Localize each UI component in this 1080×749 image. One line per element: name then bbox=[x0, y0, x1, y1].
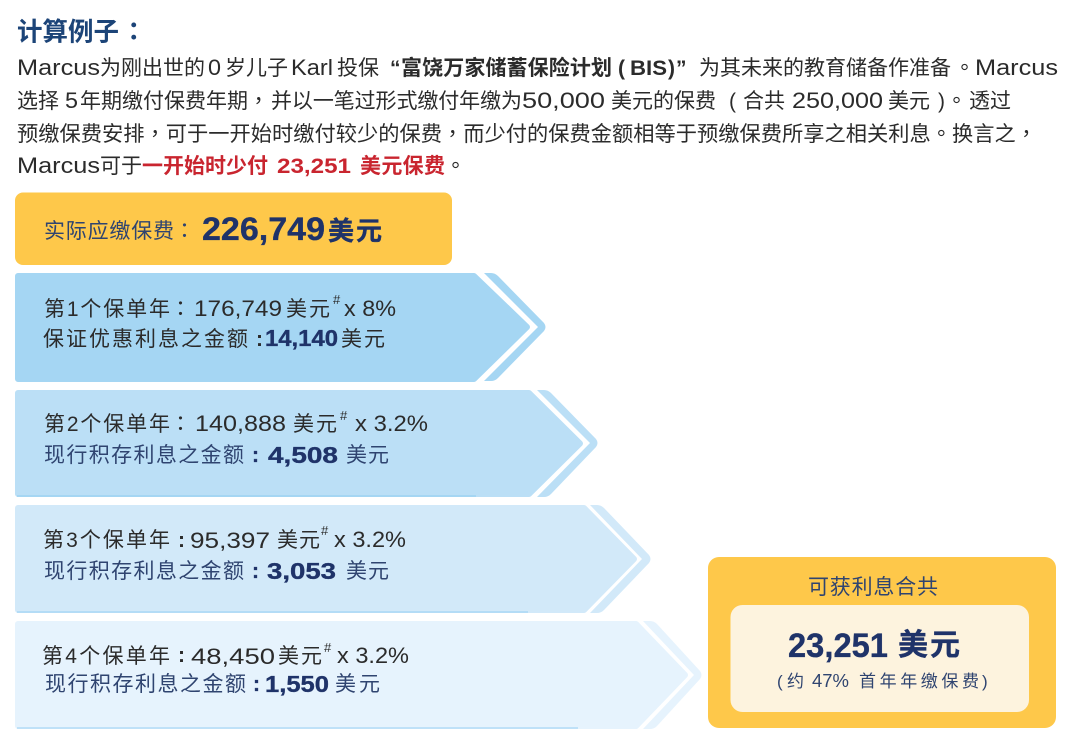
title: 计算例子 bbox=[17, 18, 119, 46]
intro paragraph: 而少付的保费金额相等于预缴保费所享之相关利息 bbox=[463, 122, 931, 146]
intro paragraph: 可于一开始时缴付较少的保费 bbox=[166, 122, 442, 146]
panel: policy year 3 arrow: 美元 bbox=[346, 560, 389, 583]
intro paragraph: 。 bbox=[946, 85, 967, 115]
intro paragraph: ， bbox=[248, 85, 269, 115]
intro paragraph: 23,251 bbox=[277, 155, 351, 178]
intro paragraph: ” bbox=[676, 57, 686, 80]
panel: policy year 2 arrow: 140,888 bbox=[195, 411, 286, 436]
panel: actual premium: 美元 bbox=[328, 216, 382, 246]
inner card: total amount bbox=[730, 605, 1029, 712]
panel: policy year 3 arrow: : bbox=[178, 529, 185, 552]
intro paragraph: 。 bbox=[445, 150, 466, 180]
panel: policy year 3 arrow: x 3.2% bbox=[334, 527, 406, 552]
panel: policy year 4 arrow: 美元 bbox=[335, 673, 380, 696]
intro paragraph: 为其未来的教育储备作准备 bbox=[699, 57, 951, 80]
panel: actual premium: ： bbox=[174, 215, 195, 245]
intro paragraph: 5 bbox=[65, 88, 78, 113]
panel: policy year 2 arrow: : bbox=[252, 444, 259, 467]
panel: actual premium: 实际应缴保费 bbox=[44, 220, 174, 243]
panel: policy year 4 arrow: 1,550 bbox=[265, 671, 329, 697]
panel: policy year 1 arrow: 美元 bbox=[341, 328, 385, 351]
panel: policy year 2 arrow: x 3.2% bbox=[355, 411, 428, 436]
intro paragraph: 美元 bbox=[888, 90, 930, 113]
intro paragraph: 50,000 bbox=[522, 88, 605, 113]
panel: policy year 1 arrow: # bbox=[333, 292, 341, 307]
intro paragraph: 。 bbox=[954, 52, 975, 82]
panel: total interest bbox=[708, 557, 1056, 728]
panel: actual premium bbox=[15, 192, 452, 265]
intro paragraph: Marcus bbox=[975, 55, 1058, 80]
panel: policy year 4 arrow: : bbox=[253, 673, 260, 696]
inner card: total amount: ( bbox=[777, 672, 783, 691]
panel: policy year 3 arrow: 95,397 bbox=[190, 528, 270, 553]
inner card: total amount: 首年年缴保费 bbox=[859, 672, 979, 691]
panel: policy year 4 arrow: 48,450 bbox=[191, 644, 275, 669]
panel: policy year 4 arrow: 美元 bbox=[278, 645, 322, 668]
intro paragraph bbox=[17, 52, 1058, 180]
intro paragraph: 一开始时少付 bbox=[142, 155, 268, 178]
panel: policy year 3 arrow: 3,053 bbox=[267, 558, 336, 584]
panel: policy year 1 arrow: 第1个保单年 bbox=[44, 298, 170, 321]
panel: policy year 4 arrow bbox=[17, 621, 702, 729]
intro paragraph: ， bbox=[144, 118, 166, 148]
intro paragraph: 。 bbox=[931, 118, 952, 148]
intro paragraph: 换言之 bbox=[952, 122, 1016, 146]
inner card: total amount: 23,251 bbox=[788, 627, 888, 665]
panel: policy year 2 arrow bbox=[17, 390, 598, 497]
intro paragraph: ， bbox=[1016, 118, 1037, 148]
intro paragraph: ( bbox=[729, 90, 736, 113]
panel: policy year 3 arrow: 现行积存利息之金额 bbox=[44, 560, 244, 583]
intro paragraph: “ bbox=[390, 57, 400, 80]
panel: policy year 4 arrow: x 3.2% bbox=[337, 643, 409, 668]
panel: policy year 3 arrow: 第3个保单年 bbox=[43, 529, 170, 552]
intro paragraph: 投保 bbox=[337, 57, 379, 80]
panel: policy year 2 arrow: ： bbox=[170, 408, 191, 438]
panel: policy year 1 arrow: 14,140 bbox=[265, 325, 338, 351]
panel: policy year 1 arrow: 176,749 bbox=[194, 296, 282, 321]
intro paragraph: 预缴保费安排 bbox=[17, 122, 145, 146]
intro paragraph: 透过 bbox=[969, 90, 1011, 113]
panel: policy year 4 arrow: 第4个保单年 bbox=[42, 645, 170, 668]
intro paragraph: 选择 bbox=[17, 90, 59, 113]
panel: policy year 4 arrow: : bbox=[178, 644, 185, 667]
panel: policy year 3 arrow: : bbox=[252, 560, 259, 583]
panel: policy year 2 arrow: 第2个保单年 bbox=[44, 413, 170, 436]
panel: policy year 1 arrow: x 8% bbox=[344, 296, 396, 321]
panel: policy year 3 arrow: # bbox=[321, 523, 329, 538]
panel: policy year 1 arrow: 保证优惠利息之金额 bbox=[43, 328, 248, 351]
panel: policy year 2 arrow: 美元 bbox=[346, 444, 389, 467]
heading: total interest: 可获利息合共 bbox=[808, 576, 938, 599]
intro paragraph: ) bbox=[668, 57, 675, 80]
inner card: total amount: ) bbox=[982, 672, 988, 691]
title bbox=[17, 12, 147, 48]
intro paragraph: 富饶万家储蓄保险计划 bbox=[401, 56, 612, 80]
panel: policy year 2 arrow: 美元 bbox=[293, 413, 337, 436]
panel: policy year 1 arrow: 美元 bbox=[286, 298, 330, 321]
intro paragraph: 合共 bbox=[743, 90, 785, 113]
panel: policy year 3 arrow: 美元 bbox=[277, 529, 320, 552]
intro paragraph: Marcus bbox=[17, 55, 100, 80]
intro paragraph: 美元的保费 bbox=[611, 90, 716, 113]
inner card: total amount: 约 bbox=[787, 672, 804, 691]
intro paragraph: Karl bbox=[291, 55, 333, 80]
intro paragraph: ， bbox=[442, 118, 463, 148]
intro paragraph: 岁儿子 bbox=[225, 57, 288, 80]
panel: policy year 4 arrow: # bbox=[324, 640, 332, 655]
panel: policy year 1 arrow bbox=[18, 273, 546, 381]
inner card: total amount: 美元 bbox=[898, 629, 960, 662]
intro paragraph: Marcus bbox=[17, 153, 100, 178]
panel: policy year 1 arrow: ： bbox=[170, 293, 191, 323]
panel: policy year 2 arrow: 4,508 bbox=[268, 442, 338, 468]
panel: actual premium: 226,749 bbox=[202, 211, 325, 247]
intro paragraph: 可于 bbox=[100, 155, 142, 178]
intro paragraph: ) bbox=[938, 90, 945, 113]
panel: policy year 1 arrow: : bbox=[256, 328, 263, 351]
panel: policy year 2 arrow: 现行积存利息之金额 bbox=[44, 444, 244, 467]
panel: policy year 2 arrow: # bbox=[340, 408, 348, 423]
panel: policy year 4 arrow: 现行积存利息之金额 bbox=[45, 673, 246, 696]
title: ： bbox=[121, 12, 147, 48]
intro paragraph: 为刚出世的 bbox=[100, 57, 205, 80]
intro paragraph: ( bbox=[618, 57, 625, 80]
intro paragraph: 并以一笔过形式缴付年缴为 bbox=[271, 90, 522, 113]
intro paragraph: 年期缴付保费年期 bbox=[80, 90, 248, 113]
intro paragraph: 0 bbox=[208, 55, 221, 80]
intro paragraph: 250,000 bbox=[792, 88, 883, 113]
intro paragraph: 美元保费 bbox=[360, 155, 445, 178]
inner card: total amount: 47% bbox=[812, 671, 849, 691]
panel: policy year 3 arrow bbox=[17, 505, 650, 613]
intro paragraph: BIS bbox=[630, 57, 667, 80]
